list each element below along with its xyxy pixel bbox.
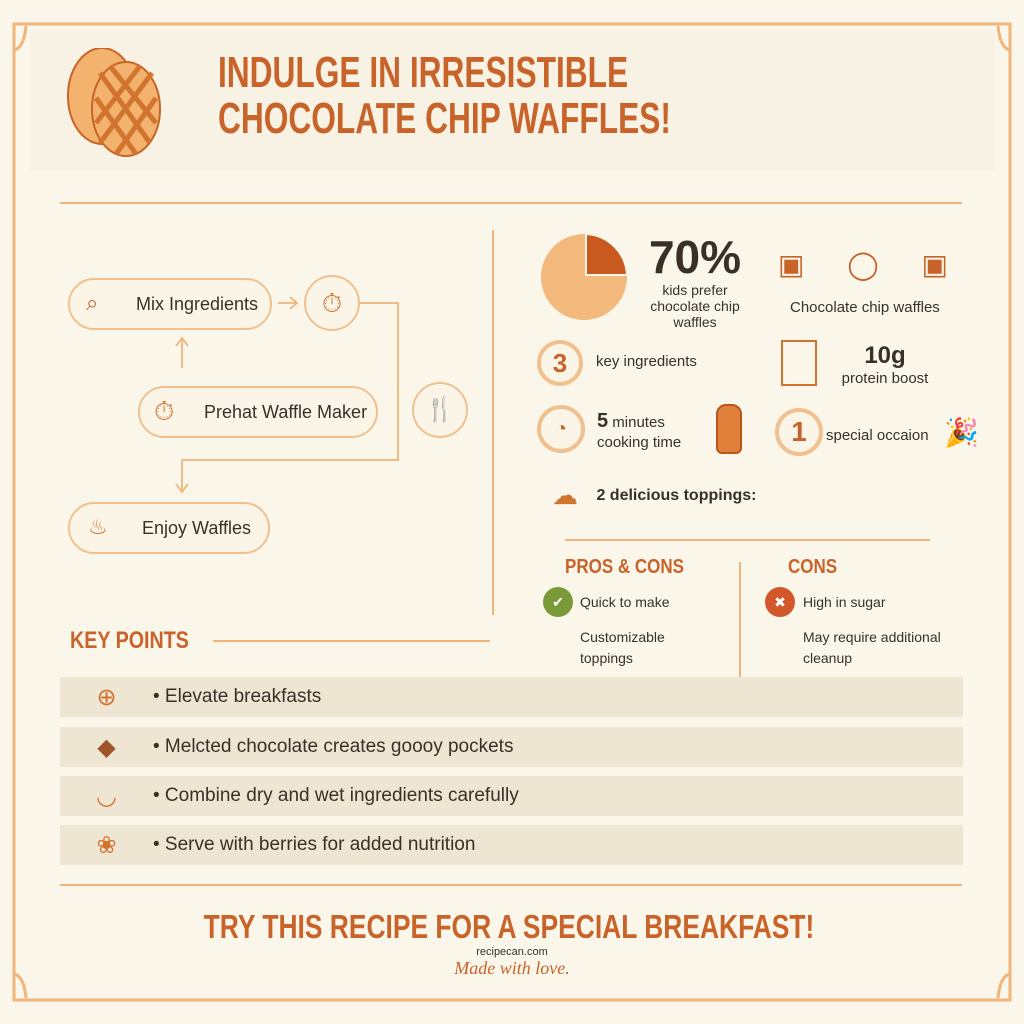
icon: party: 🎉 xyxy=(944,417,979,448)
icons: ingredients: ◯ xyxy=(847,249,879,280)
stat: 70% xyxy=(649,231,741,330)
step: mix ingredients xyxy=(68,278,272,330)
icons: ingredients: ▣ xyxy=(922,249,948,280)
cons: cleanup xyxy=(803,650,852,666)
text: Chocolate chip waffles xyxy=(790,299,940,316)
stat: 10g xyxy=(781,340,817,386)
pros: Quick to make xyxy=(580,594,669,610)
stat: 5 minutes: ◔ xyxy=(555,418,567,440)
step: enjoy xyxy=(68,502,270,554)
title xyxy=(218,48,671,143)
stat: 1 special occasion xyxy=(775,408,823,456)
text: ◆ xyxy=(97,734,116,760)
cons: High in sugar xyxy=(803,594,886,610)
text: ⊕ xyxy=(96,684,117,710)
icon: utensils: 🍴 xyxy=(425,396,455,423)
text: ❀ xyxy=(96,832,117,858)
cons: ✖ xyxy=(774,594,786,610)
text: 5 minutes xyxy=(597,410,665,432)
cons: Sugar in sugar xyxy=(803,681,894,697)
icon: waffles xyxy=(67,48,161,157)
pros: PROS & CONS xyxy=(565,556,684,578)
key point rows xyxy=(60,677,963,865)
text: • Serve with berries for added nutrition xyxy=(153,834,475,855)
step: preheat: Prehat Waffle Maker xyxy=(204,402,367,422)
text: ◡ xyxy=(96,782,117,810)
cons: May require additional xyxy=(803,629,941,645)
footer: recipecan.com xyxy=(476,946,548,958)
icon: timer: ⏱ xyxy=(322,288,342,318)
cons: CONS xyxy=(788,556,837,578)
step: enjoy: ♨ xyxy=(88,514,108,539)
icon: utensils xyxy=(412,382,468,438)
stat: 3 key ingredients: 3 xyxy=(553,348,567,378)
text: • Melcted chocolate creates goooy pockets xyxy=(153,736,513,757)
pros xyxy=(543,556,686,697)
text: • Combine dry and wet ingredients carefully xyxy=(153,785,519,806)
step: mix ingredients: Mix Ingredients xyxy=(136,294,258,314)
stat: 3 key ingredients xyxy=(537,340,583,386)
text: special occaion xyxy=(826,427,929,444)
stat: 5 minutes xyxy=(537,405,585,453)
pros: Loved to all ages xyxy=(580,681,686,697)
step: enjoy: Enjoy Waffles xyxy=(142,518,251,538)
icon: syrup xyxy=(716,404,742,454)
call to action: TRY THIS RECIPE FOR A SPECIAL BREAKFAST! xyxy=(204,908,814,945)
step: preheat: ⏱ xyxy=(154,396,174,426)
icons: ingredients xyxy=(778,249,948,281)
pros: Customizable xyxy=(580,629,665,645)
text: • Elevate breakfasts xyxy=(153,686,321,707)
pros: toppings xyxy=(580,650,633,666)
cons xyxy=(765,556,941,697)
text: cooking time xyxy=(597,434,681,451)
pie chart 70% xyxy=(541,234,627,320)
text: 10g xyxy=(864,342,906,369)
toppings: ☁ 2 delicious toppings: xyxy=(552,480,756,510)
text: ✔ xyxy=(552,594,564,610)
text: Made with love. xyxy=(454,958,570,978)
stat: 70%: kids prefer xyxy=(662,282,728,298)
text: key ingredients xyxy=(596,353,697,370)
step: preheat xyxy=(138,386,378,438)
text: protein boost xyxy=(842,370,928,387)
stat: 70%: chocolate chip xyxy=(650,298,740,314)
stat: 70%: 70% xyxy=(649,231,741,283)
key points heading: KEY POINTS xyxy=(70,627,189,654)
icons: ingredients: ▣ xyxy=(778,249,804,280)
stat: 70%: waffles xyxy=(673,314,717,330)
stat: 1 special occasion: 1 xyxy=(791,416,807,447)
title: INDULGE IN IRRESISTIBLE xyxy=(218,48,628,97)
step: mix ingredients: ⌕ xyxy=(86,290,98,315)
icon: timer xyxy=(304,275,360,331)
title: CHOCOLATE CHIP WAFFLES! xyxy=(218,94,671,143)
